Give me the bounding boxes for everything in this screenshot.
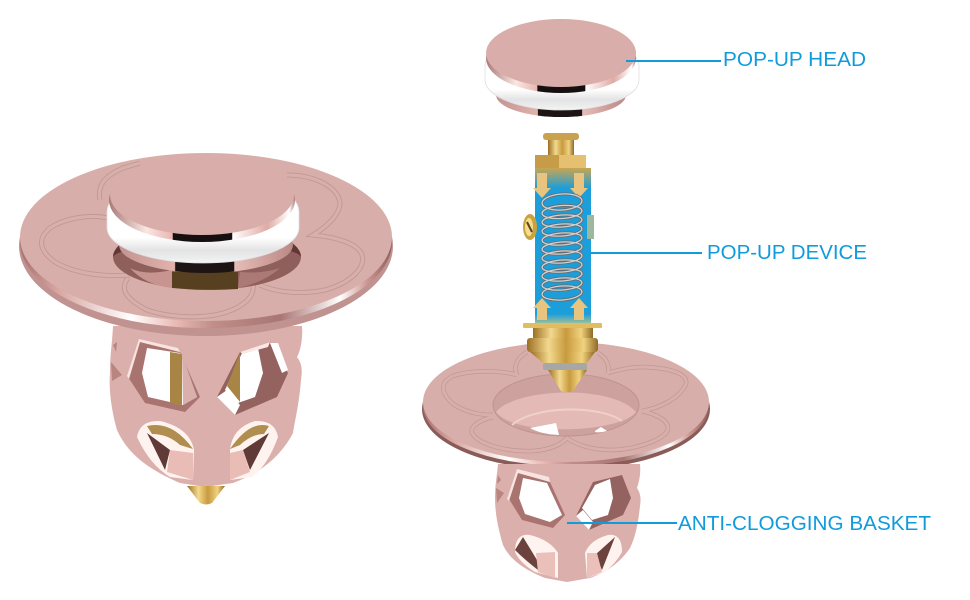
arrows: [533, 173, 588, 320]
brass cone: [548, 370, 587, 392]
hex nut: [535, 155, 586, 170]
head: assembled: [107, 155, 299, 273]
brass collar: [523, 323, 602, 328]
illustration: exploded parts: [422, 19, 710, 582]
socket: exploded: [493, 374, 639, 436]
pop-up device: [523, 133, 602, 392]
basket: assembled: [110, 326, 302, 487]
illustration: assembled drain stopper: [19, 153, 393, 504]
tip: brass cone: [187, 486, 225, 504]
screw: [523, 214, 537, 240]
pop-up head: [485, 19, 639, 117]
lower openings: [137, 421, 194, 480]
socket opening: [113, 224, 301, 290]
callout: anti-clogging basket: ANTI-CLOGGING BASKET: [678, 513, 931, 535]
side tab: [587, 215, 594, 239]
threaded top: [543, 133, 579, 140]
spring: [541, 193, 583, 301]
silver ring: [543, 363, 587, 370]
flange: assembled: [19, 153, 393, 336]
blue body: [535, 168, 591, 325]
flange: exploded: [422, 342, 710, 470]
basket: exploded: [495, 464, 641, 582]
petal engravings: [42, 163, 363, 317]
callout: pop-up device: POP-UP DEVICE: [707, 242, 867, 264]
callout: pop-up head: POP-UP HEAD: [723, 49, 866, 71]
